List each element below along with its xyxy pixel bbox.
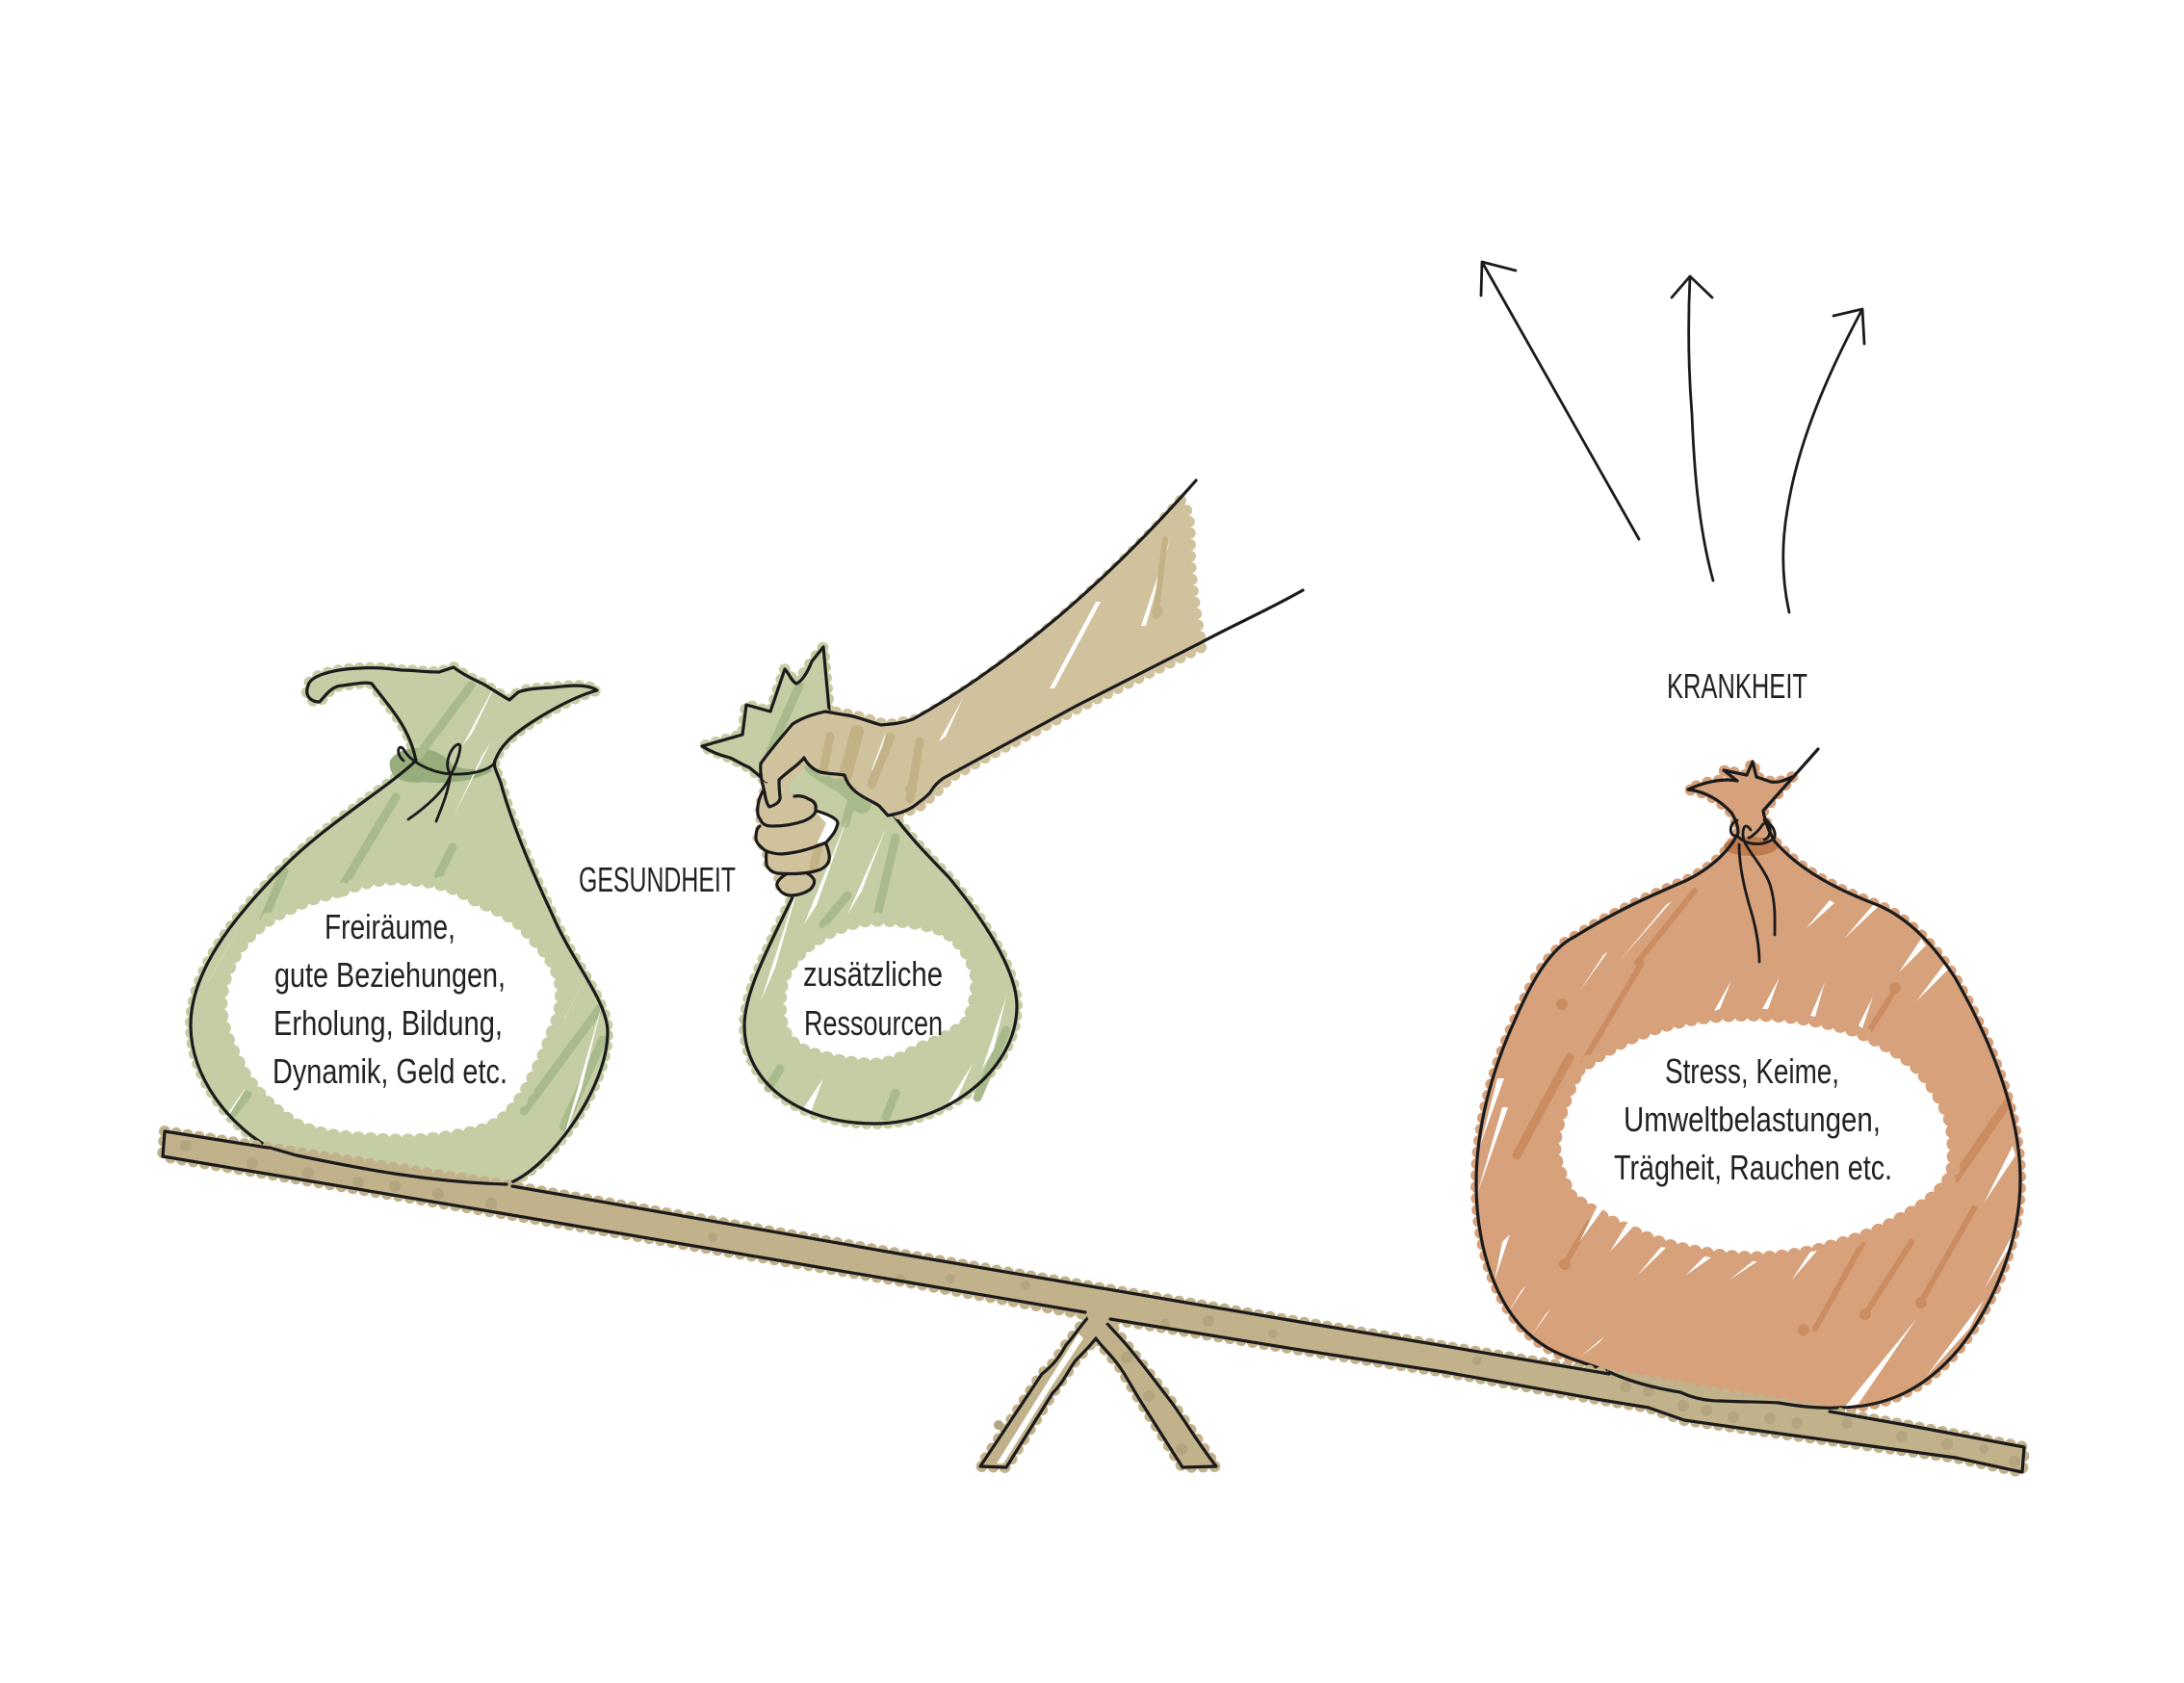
text: resources in left sack: [273, 907, 507, 1091]
icon: string tied around neck: [1730, 820, 1775, 962]
fingers: [756, 791, 829, 895]
text: risks in right sack: Umweltbelastungen,: [1624, 1100, 1881, 1139]
text: additional resources: Ressourcen: [804, 1003, 943, 1043]
arrow: up left: [1481, 262, 1639, 539]
text: risks in right sack: [1614, 1051, 1892, 1187]
white label area: right sack: [1554, 1014, 1954, 1258]
white label area: middle sack: [780, 919, 977, 1065]
text: resources in left sack: Freiräume,: [325, 907, 455, 946]
panel: right orange sack: [1476, 749, 2020, 1408]
text: resources in left sack: Erholung, Bildung,: [273, 1003, 503, 1043]
text: risks in right sack: Trägheit, Rauchen etc.: [1614, 1148, 1892, 1187]
text: risks in right sack: Stress, Keime,: [1665, 1051, 1839, 1091]
white label area: left sack: [221, 878, 561, 1141]
beam plank: [163, 1131, 2024, 1472]
label: Gesundheit: GESUNDHEIT: [579, 860, 736, 899]
text: resources in left sack: gute Beziehungen,: [274, 955, 506, 995]
label: Krankheit: KRANKHEIT: [1667, 666, 1807, 706]
seesaw beam and fulcrum: [163, 1131, 2024, 1472]
icon: string tied around neck: [399, 744, 495, 821]
panel: left green sack: [191, 667, 608, 1184]
text: additional resources: [803, 954, 943, 1043]
arrow: up right: [1783, 309, 1864, 612]
icon: reaching arm and hand: [756, 480, 1303, 895]
arrow: up: [1672, 276, 1713, 581]
text: additional resources: zusätzliche: [803, 954, 943, 994]
panel: middle sack with additional resources: [702, 647, 1017, 1124]
sack bottoms resting on beam: [270, 1148, 1837, 1408]
fulcrum legs: [980, 1302, 1216, 1467]
text: resources in left sack: Dynamik, Geld etc.: [273, 1051, 507, 1091]
